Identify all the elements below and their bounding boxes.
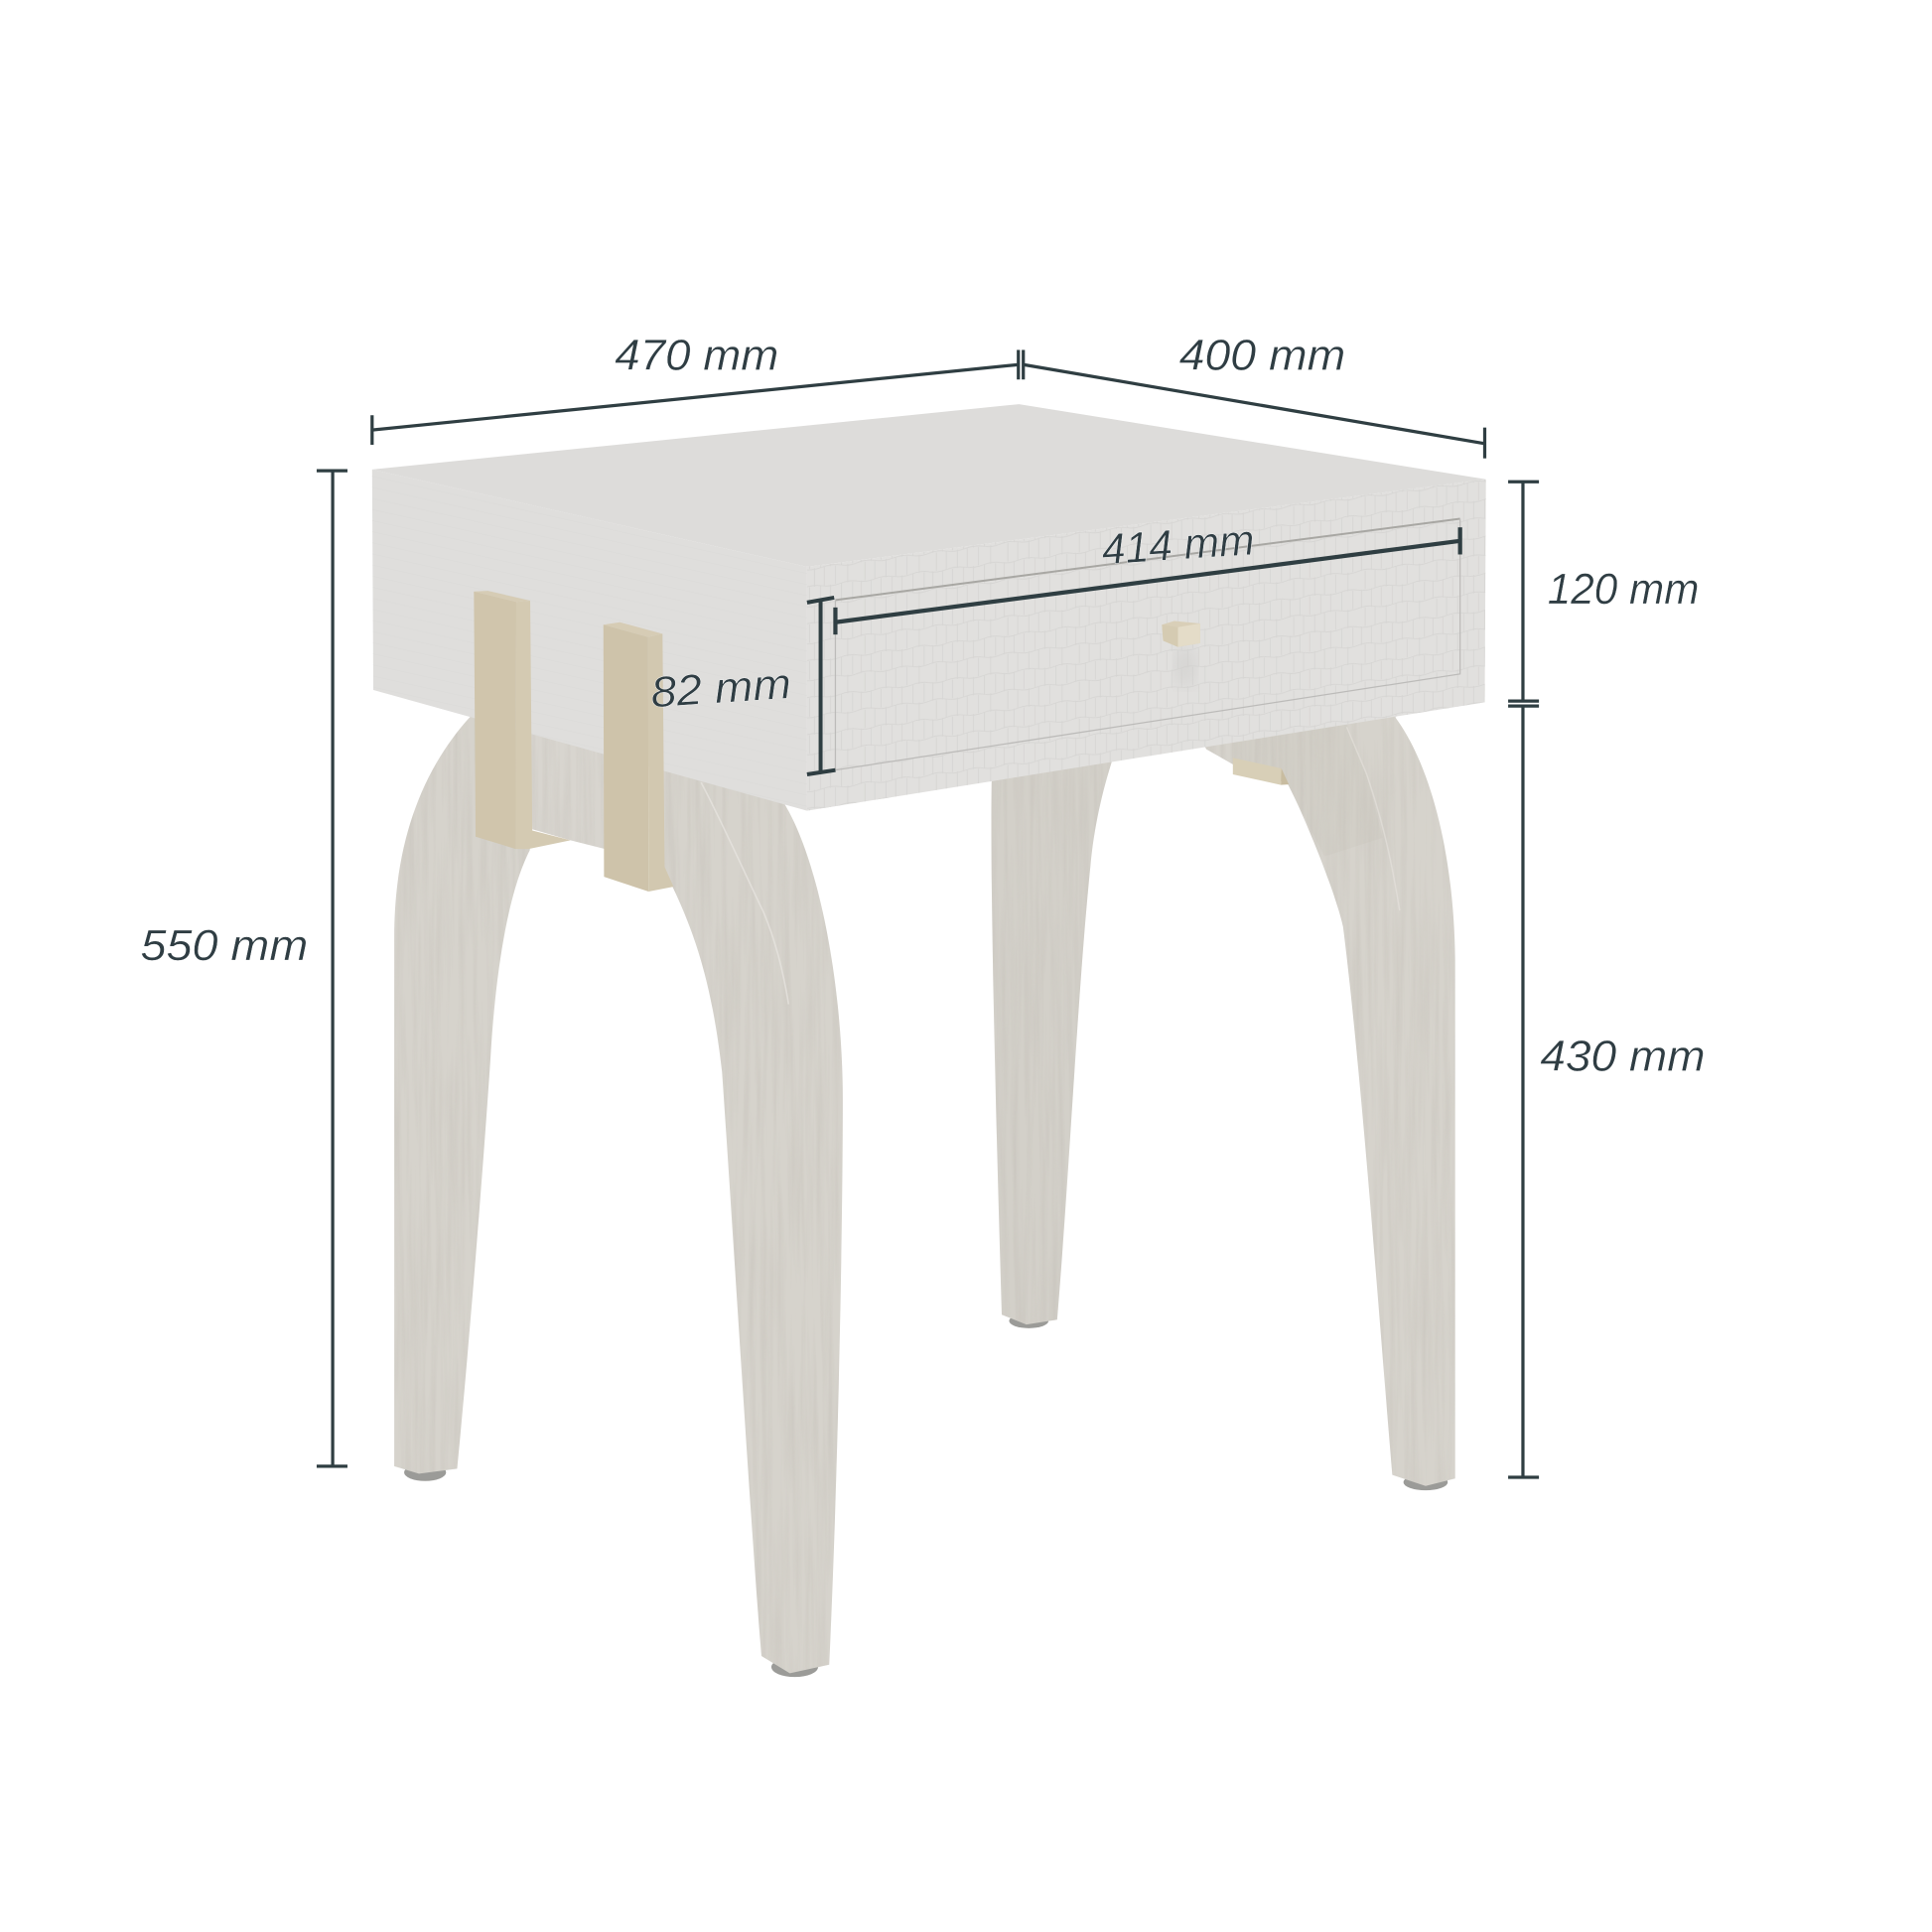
label: 120 mm: 120 mm <box>1548 566 1699 614</box>
illustration: bedside table with dimensions <box>141 340 1704 1678</box>
drawer outline <box>835 518 1460 770</box>
label: 82 mm: 82 mm <box>649 660 792 717</box>
knob shadow <box>1174 645 1196 688</box>
dimension: 120 mm top height <box>1508 482 1539 701</box>
gold post: left <box>474 591 571 849</box>
icon: table feet <box>404 1313 1448 1677</box>
label: 414 mm: 414 mm <box>1100 516 1256 574</box>
gold post: right <box>604 622 673 892</box>
right leg with rail <box>1195 705 1460 1488</box>
dimension: 470 mm width <box>372 349 1019 445</box>
dimension: 550 mm total height <box>317 471 347 1466</box>
left side face <box>372 470 807 811</box>
dimension: 82 mm drawer height <box>807 598 835 774</box>
table body <box>372 404 1486 811</box>
table top face <box>372 404 1486 567</box>
gold bracket: right <box>1233 758 1289 785</box>
dimension: 430 mm leg height <box>1508 706 1539 1477</box>
rail between left legs <box>532 737 604 849</box>
back leg <box>991 762 1112 1324</box>
label: 550 mm: 550 mm <box>140 922 308 970</box>
label: 470 mm: 470 mm <box>615 332 778 379</box>
left leg <box>394 717 532 1473</box>
front face with croc texture <box>807 480 1486 811</box>
front corner leg <box>663 770 843 1674</box>
dimension: 414 mm drawer width <box>835 527 1460 634</box>
label: 400 mm: 400 mm <box>1179 332 1345 379</box>
icon: drawer knob <box>1162 621 1200 647</box>
label: 430 mm: 430 mm <box>1540 1033 1706 1080</box>
dimension: 400 mm depth <box>1024 349 1484 459</box>
